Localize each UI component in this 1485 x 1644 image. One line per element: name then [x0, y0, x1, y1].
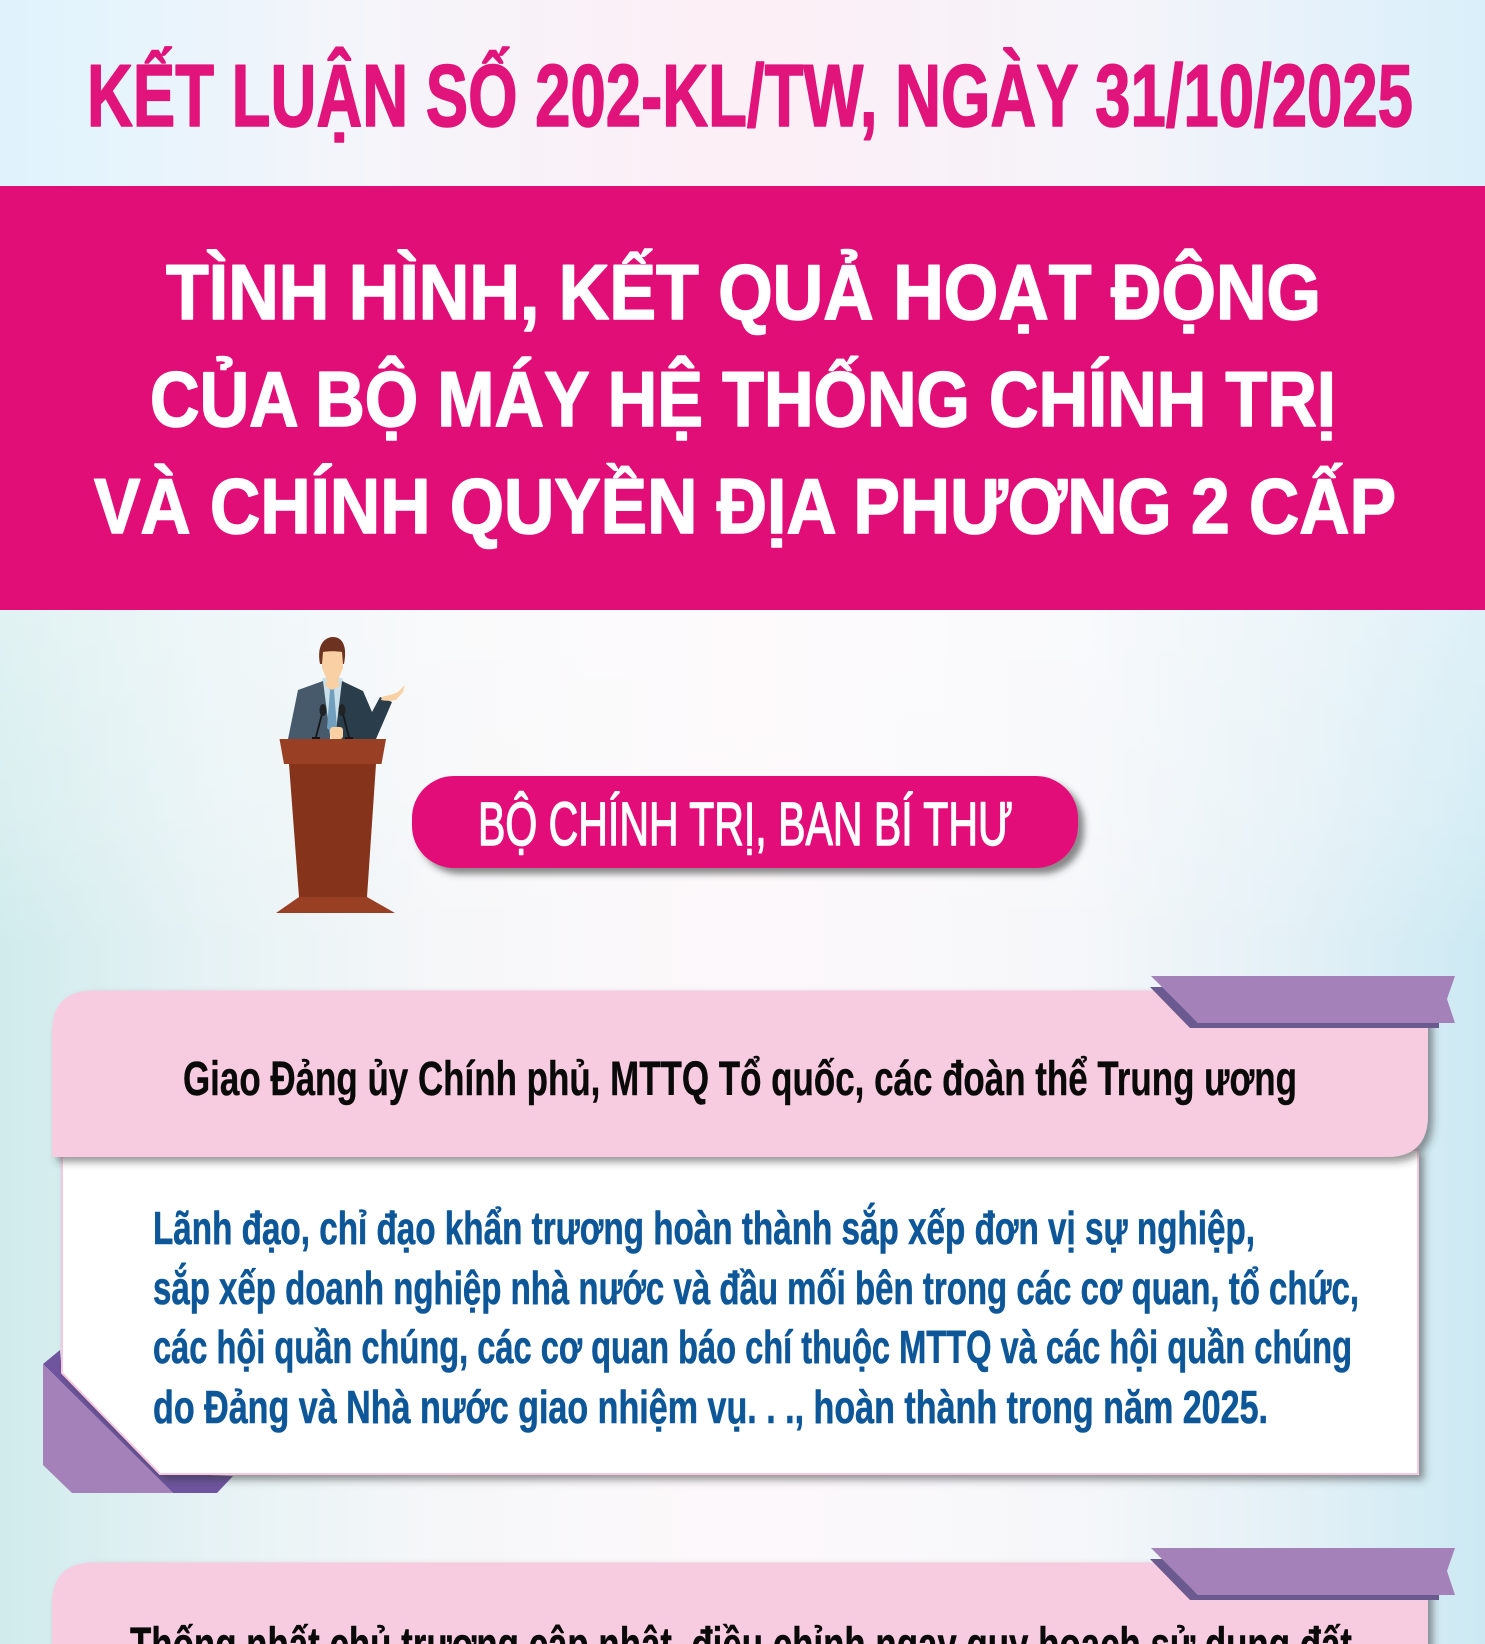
top-right ribbon: [1150, 976, 1455, 1028]
speaker figure: [288, 637, 405, 739]
icon: speaker at podium: [276, 637, 405, 913]
card 1 body: white text box: [62, 1150, 1418, 1474]
banner: main heading: [0, 186, 1485, 610]
card 2 header: pink title: [52, 1562, 1428, 1644]
top-right ribbon: [1150, 1548, 1455, 1600]
pill: Politburo and Secretariat heading: BỘ CHÍNH TRỊ, BAN BÍ THƯ: [478, 790, 1013, 858]
panel: card 1: [43, 976, 1455, 1493]
podium: [276, 739, 395, 913]
pill: Politburo and Secretariat heading: [412, 776, 1078, 868]
card 1 header: pink title: [52, 990, 1428, 1157]
banner: main heading: TÌNH HÌNH, KẾT QUẢ HOẠT ĐỘNG: [166, 248, 1321, 336]
left-bottom ribbon: [43, 1364, 173, 1493]
left-bottom ribbon dark fold: [43, 1350, 233, 1493]
banner: main heading: CỦA BỘ MÁY HỆ THỐNG CHÍNH TRỊ: [150, 355, 1336, 443]
panel: card 2: [52, 1548, 1455, 1644]
